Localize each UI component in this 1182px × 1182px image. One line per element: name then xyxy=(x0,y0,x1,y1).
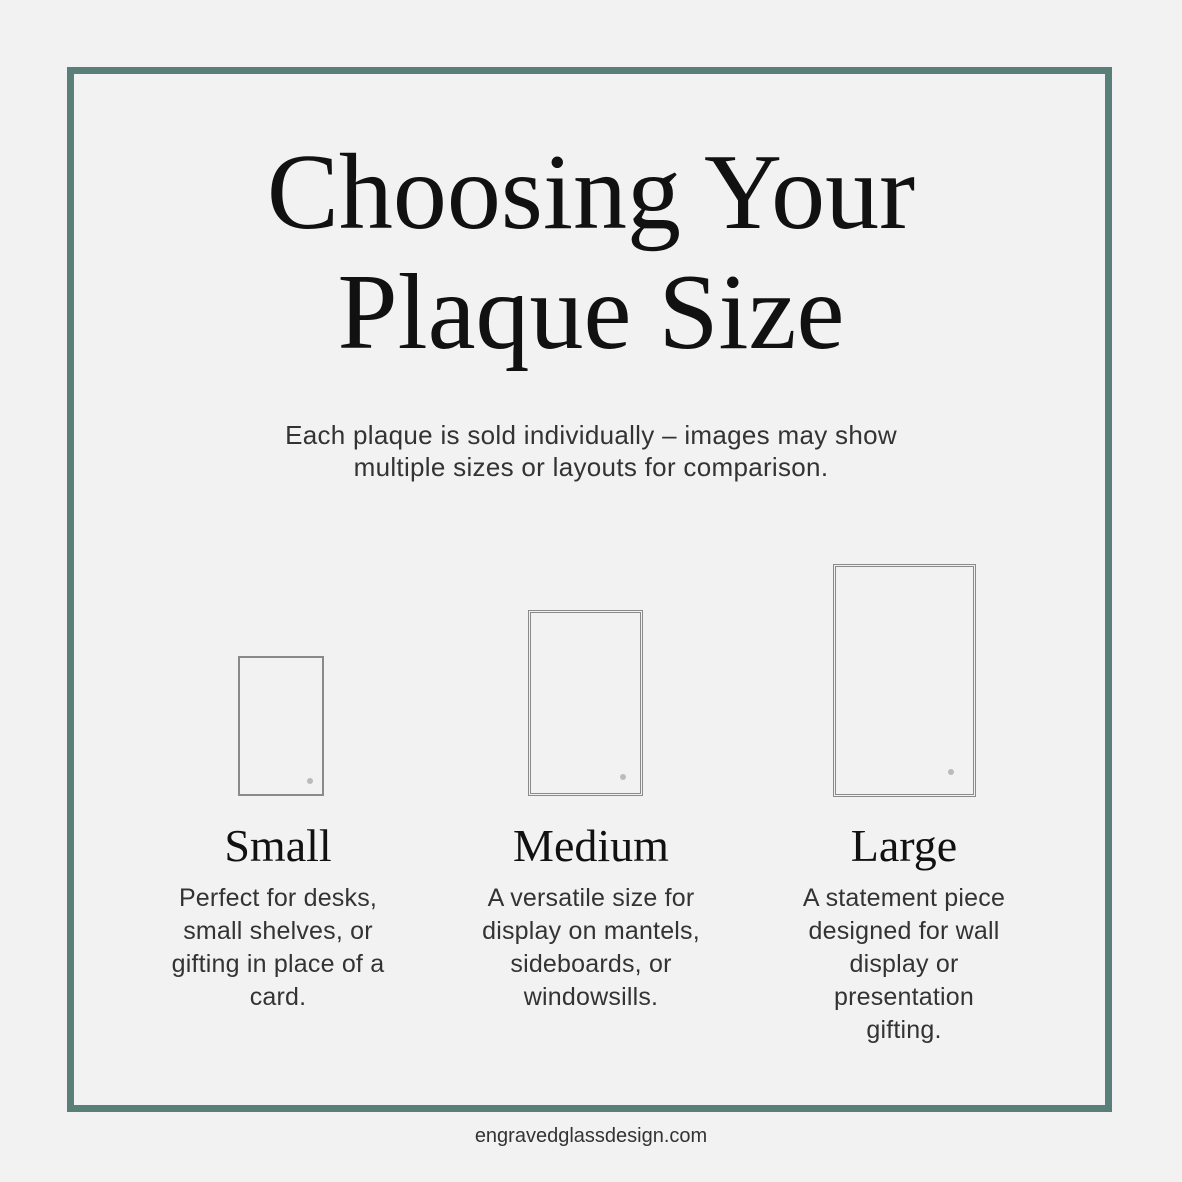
column: small: small shelves, or xyxy=(183,917,373,945)
column: medium xyxy=(482,820,700,1011)
title: Plaque Size xyxy=(338,253,844,372)
column: large: A statement piece xyxy=(803,884,1005,912)
column: medium: display on mantels, xyxy=(482,917,700,945)
column: medium: sideboards, or xyxy=(510,950,672,978)
icon: small plaque xyxy=(238,656,324,796)
icon: large plaque xyxy=(833,564,976,797)
column: small: Small xyxy=(224,820,332,871)
footer url: engravedglassdesign.com xyxy=(475,1125,707,1147)
column: large: designed for wall xyxy=(808,917,1000,945)
column: medium: A versatile size for xyxy=(488,884,694,912)
column: medium: Medium xyxy=(513,820,669,871)
column: medium: windowsills. xyxy=(524,983,658,1011)
subtitle: Each plaque is sold individually – images may show xyxy=(285,420,897,450)
subtitle xyxy=(285,420,897,482)
column: small: Perfect for desks, xyxy=(179,884,377,912)
title: Choosing Your xyxy=(267,133,915,252)
column: large: presentation xyxy=(834,983,974,1011)
column: small xyxy=(172,820,384,1011)
column: large: gifting. xyxy=(866,1016,942,1044)
column: large xyxy=(803,820,1005,1044)
frame border xyxy=(67,67,1112,1112)
title xyxy=(267,133,915,372)
icon: medium plaque xyxy=(528,610,643,796)
column: small: gifting in place of a xyxy=(172,950,384,978)
column: small: card. xyxy=(250,983,306,1011)
subtitle: multiple sizes or layouts for comparison. xyxy=(354,452,828,482)
column: large: display or xyxy=(850,950,958,978)
column: large: Large xyxy=(851,820,957,871)
